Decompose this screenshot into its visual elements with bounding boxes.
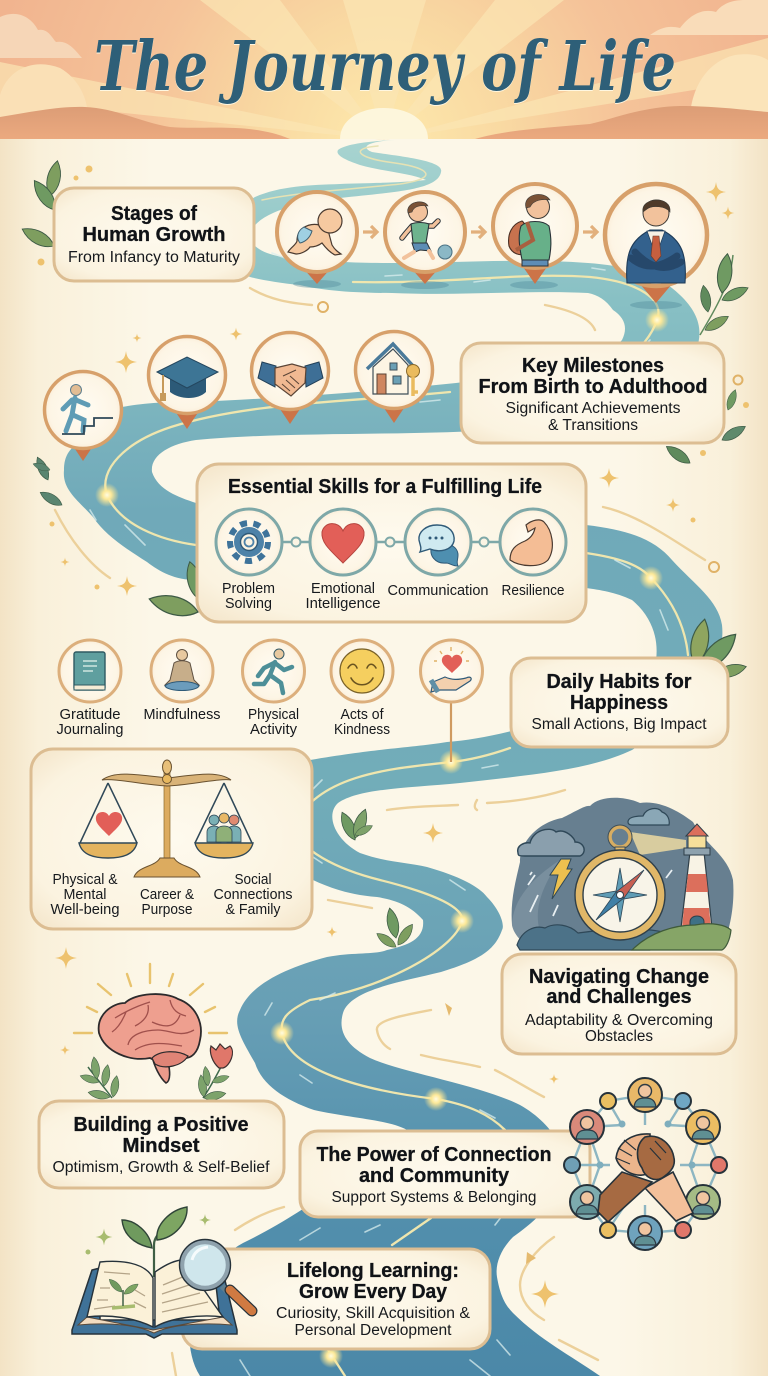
- panel: navigating change: Navigating Change: [529, 966, 709, 988]
- pin shadows on river: [293, 280, 682, 309]
- illustration: brain with plants: [74, 964, 232, 1102]
- panel: lifelong learning: Personal Development: [294, 1322, 452, 1339]
- decorative leaves: [19, 159, 750, 950]
- habit: physical activity: [242, 640, 304, 738]
- panel: key milestones: Significant Achievements: [506, 400, 681, 417]
- gold sparkles and dots: [38, 166, 749, 1308]
- habit: physical activity: Physical: [248, 707, 299, 723]
- panel: stages of human growth: [54, 188, 254, 281]
- chart: balance scale: [79, 760, 253, 877]
- pin: infant: [277, 192, 357, 284]
- pin: graduation cap: [148, 336, 226, 429]
- panel: key milestones: Key Milestones: [522, 355, 664, 377]
- panel: key milestones: From Birth to Adulthood: [478, 376, 708, 398]
- daily habits connector line: [450, 702, 452, 762]
- panel: essential skills: [197, 464, 586, 622]
- arrow: [471, 226, 485, 238]
- panel: positive mindset: Optimism, Growth & Self-Belief: [52, 1159, 270, 1176]
- panel: stages of human growth: From Infancy to Maturity: [68, 249, 240, 266]
- panel: positive mindset: Mindset: [122, 1135, 200, 1157]
- panel: essential skills: Communication: [388, 583, 488, 599]
- habit: gratitude journaling: Journaling: [56, 722, 124, 738]
- sunrise banner: [0, 0, 768, 140]
- winding river path: [64, 140, 722, 1376]
- panel: daily habits for happiness: [511, 658, 728, 747]
- habit: gratitude journaling: Gratitude: [60, 707, 120, 723]
- panel: key milestones: [461, 343, 724, 443]
- illustration: compass in a storm with lighthouse: [512, 798, 733, 950]
- panel: daily habits for happiness: Small Actions, Big Impact: [532, 716, 707, 733]
- panel: essential skills: Essential Skills for a Fulfilling Life: [228, 476, 542, 498]
- illustration: open book with sprout and magnifier: [72, 1207, 252, 1338]
- panel: life balance: [31, 749, 312, 929]
- panel: life balance: Career &: [140, 887, 194, 903]
- habit: mindfulness: [144, 640, 220, 723]
- panel: daily habits for happiness: Daily Habits for: [546, 671, 692, 693]
- habit: acts of kindness smiley: Kindness: [334, 722, 390, 738]
- panel: essential skills: Resilience: [502, 583, 564, 599]
- pin: child with ball: [385, 192, 465, 284]
- habit: hand and heart: [420, 640, 482, 702]
- panel: key milestones: & Transitions: [548, 417, 638, 434]
- panel: life balance: Connections: [214, 887, 292, 903]
- path lights: [95, 308, 669, 1368]
- icon: flexed arm: [510, 520, 552, 566]
- clouds: [0, 14, 82, 58]
- panel: navigating change: [502, 954, 736, 1054]
- panel: essential skills: Emotional: [311, 581, 375, 597]
- icon: gear: [230, 523, 268, 561]
- pin: handshake: [252, 332, 328, 424]
- panel: lifelong learning: Grow Every Day: [299, 1281, 448, 1303]
- panel: navigating change: and Challenges: [546, 986, 692, 1008]
- panel: essential skills: Problem: [222, 581, 275, 597]
- panel: life balance: Mental: [64, 887, 106, 903]
- pin: house and key: [356, 332, 432, 423]
- panel: lifelong learning: Lifelong Learning:: [287, 1260, 459, 1282]
- icon: heart: [322, 524, 364, 563]
- habit: mindfulness: Mindfulness: [144, 707, 220, 723]
- panel: life balance: Social: [234, 872, 272, 888]
- habit: gratitude journaling: [56, 640, 124, 738]
- habit: physical activity: Activity: [250, 722, 298, 738]
- habit: acts of kindness smiley: [331, 640, 393, 738]
- panel: life balance: Purpose: [142, 902, 192, 918]
- pin: teen with backpack: [493, 184, 577, 284]
- panel: positive mindset: [39, 1101, 284, 1188]
- panel: lifelong learning: Curiosity, Skill Acquisition &: [276, 1305, 471, 1322]
- panel: stages of human growth: Stages of: [111, 203, 197, 225]
- icon: speech bubbles: [419, 525, 458, 566]
- panel: life balance: Well-being: [50, 902, 120, 918]
- panel: life balance: & Family: [226, 902, 281, 918]
- panel: navigating change: Adaptability & Overcoming: [525, 1012, 713, 1029]
- panel: connection and community: [300, 1131, 590, 1217]
- arrow: [363, 226, 377, 238]
- arrow: [583, 226, 597, 238]
- pin: adult in suit: [605, 184, 707, 303]
- panel: life balance: Physical &: [52, 872, 118, 888]
- panel: connection and community: The Power of Connection: [316, 1144, 552, 1166]
- illustration: community network with clasped hands: [564, 1078, 727, 1250]
- panel: lifelong learning: [182, 1249, 490, 1349]
- pin: first steps on stairs: [44, 372, 122, 461]
- panel: navigating change: Obstacles: [585, 1028, 653, 1045]
- habit: acts of kindness smiley: Acts of: [340, 707, 384, 723]
- river lane markings: [90, 146, 688, 1376]
- panel: positive mindset: Building a Positive: [74, 1114, 248, 1136]
- panel: daily habits for happiness: Happiness: [570, 692, 668, 714]
- dashed gold swoops: [55, 288, 705, 1376]
- panel: essential skills: Intelligence: [306, 596, 380, 612]
- panel: essential skills: Solving: [225, 596, 272, 612]
- panel: connection and community: Support Systems & Belonging: [332, 1189, 536, 1206]
- panel: connection and community: and Community: [359, 1165, 510, 1187]
- panel: stages of human growth: Human Growth: [82, 224, 226, 246]
